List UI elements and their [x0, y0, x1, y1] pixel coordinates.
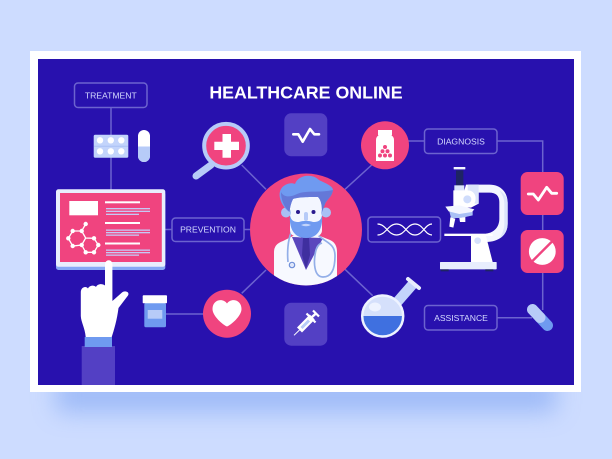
label: assistance: [424, 306, 497, 330]
hair: [280, 176, 333, 212]
title: HEALTHCARE ONLINE: [209, 82, 403, 102]
main panel: [38, 59, 574, 385]
eyes: [296, 210, 300, 214]
label: treatment: [74, 83, 147, 108]
icon: tablet screen: [56, 189, 165, 270]
icon: magnifier with cross: [196, 124, 248, 176]
icon: pulse tile: [284, 113, 327, 156]
icon: microscope: [440, 167, 508, 271]
icon: medicine jar: [143, 295, 167, 327]
text lines: [105, 201, 150, 256]
label: dna: [368, 217, 440, 242]
label: diagnosis: DIAGNOSIS: [437, 136, 485, 146]
label: diagnosis: [424, 129, 497, 154]
icon: flask: [362, 279, 419, 338]
icon: pill bottle: [361, 121, 409, 169]
label: prevention: [172, 218, 244, 242]
doctor portrait: [250, 174, 362, 290]
icon: capsule: [138, 130, 150, 162]
icon: syringe tile: [284, 303, 327, 346]
beard: [290, 215, 322, 238]
connector lines: [111, 108, 543, 318]
icon: heart: [203, 290, 251, 338]
label: treatment: TREATMENT: [85, 91, 137, 101]
label: assistance: ASSISTANCE: [434, 313, 488, 323]
frame shadow: [56, 378, 556, 412]
ears: [281, 208, 291, 218]
shirt and tie: [292, 237, 323, 270]
icon: pill card: [521, 230, 564, 273]
icon: pulse card: [521, 172, 564, 215]
white frame: [30, 51, 581, 392]
icon: diagonal capsule: [532, 310, 548, 326]
icon: blister pack: [94, 135, 128, 158]
stethoscope: [288, 233, 335, 277]
molecule: [66, 222, 101, 254]
head: [290, 192, 322, 238]
label: prevention: PREVENTION: [180, 225, 236, 235]
coat: [274, 236, 337, 290]
icon: pointing hand: [81, 260, 128, 385]
